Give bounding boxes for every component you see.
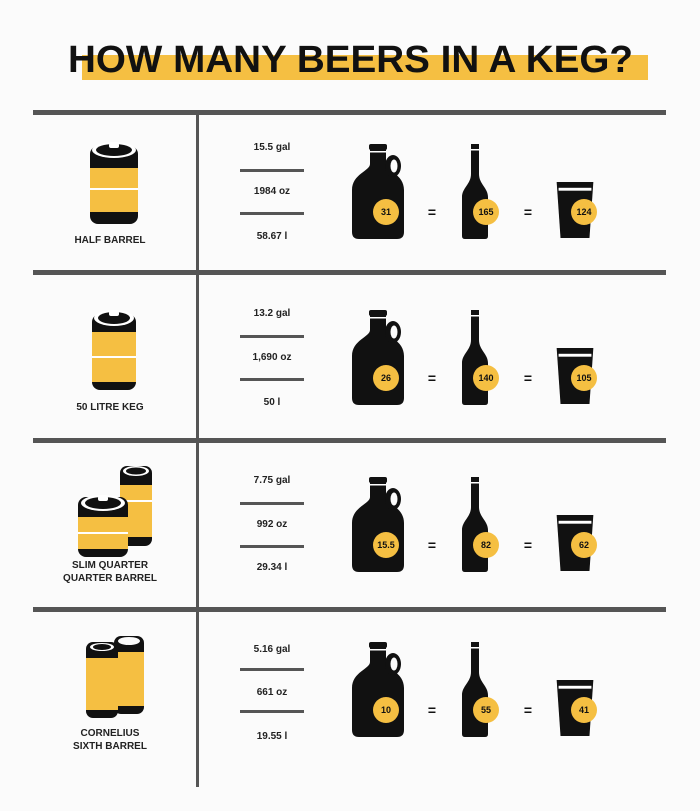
badges and equals signs: = <box>428 702 436 718</box>
label: 50 LITRE KEG <box>76 402 144 413</box>
badges and equals signs: = <box>524 537 532 553</box>
stats <box>240 475 304 573</box>
badges and equals signs: 105 <box>576 373 592 383</box>
badges and equals signs: 55 <box>481 705 491 715</box>
badges and equals signs: 124 <box>576 207 592 217</box>
label <box>73 728 147 752</box>
stats: 1,690 oz <box>253 352 291 363</box>
badges and equals signs: 31 <box>381 207 391 217</box>
panel: half barrel <box>74 142 594 246</box>
stats: 661 oz <box>257 687 287 698</box>
icons: growler = bottle = glass <box>352 642 594 737</box>
badges and equals signs: = <box>524 702 532 718</box>
icons: growler = bottle = glass <box>352 310 594 405</box>
stats: 1984 oz <box>254 186 290 197</box>
stats: 992 oz <box>257 519 287 530</box>
panel: slim quarter / quarter barrel <box>63 466 594 584</box>
label: CORNELIUS <box>81 728 139 739</box>
icons: growler = bottle = glass <box>352 477 594 572</box>
badges and equals signs: 10 <box>381 705 391 715</box>
badges and equals signs: 62 <box>579 540 589 550</box>
badges and equals signs: = <box>524 204 532 220</box>
icon: two kegs <box>78 466 152 557</box>
badges and equals signs: 41 <box>579 705 589 715</box>
label: SIXTH BARREL <box>73 741 147 752</box>
label: HALF BARREL <box>74 235 146 246</box>
panel: cornelius / sixth barrel <box>73 636 594 752</box>
badges and equals signs: 165 <box>478 207 494 217</box>
title: HOW MANY BEERS IN A KEG? <box>68 39 633 81</box>
icons: growler = bottle = glass <box>352 144 594 239</box>
label <box>63 560 157 584</box>
icon: corny kegs <box>86 636 144 718</box>
stats: 15.5 gal <box>254 142 290 153</box>
badges and equals signs: = <box>428 537 436 553</box>
label: SLIM QUARTER <box>72 560 148 571</box>
badges and equals signs: = <box>428 204 436 220</box>
badges and equals signs: 15.5 <box>377 540 395 550</box>
stats: 50 l <box>264 397 280 408</box>
stats <box>240 644 304 742</box>
badges and equals signs: 140 <box>478 373 494 383</box>
badges and equals signs: 82 <box>481 540 491 550</box>
stats <box>240 308 304 408</box>
label: QUARTER BARREL <box>63 573 157 584</box>
stats: 29.34 l <box>257 562 287 573</box>
stats: 13.2 gal <box>254 308 290 319</box>
stats: 7.75 gal <box>254 475 290 486</box>
badges and equals signs: = <box>524 370 532 386</box>
stats: 19.55 l <box>257 731 287 742</box>
icon: 50 litre keg <box>92 312 136 390</box>
panel: 50 litre keg <box>76 308 594 413</box>
badges and equals signs: 26 <box>381 373 391 383</box>
icon: half barrel keg <box>90 144 138 224</box>
stats: 58.67 l <box>257 231 287 242</box>
stats: 5.16 gal <box>254 644 290 655</box>
stats <box>240 142 304 242</box>
badges and equals signs: = <box>428 370 436 386</box>
